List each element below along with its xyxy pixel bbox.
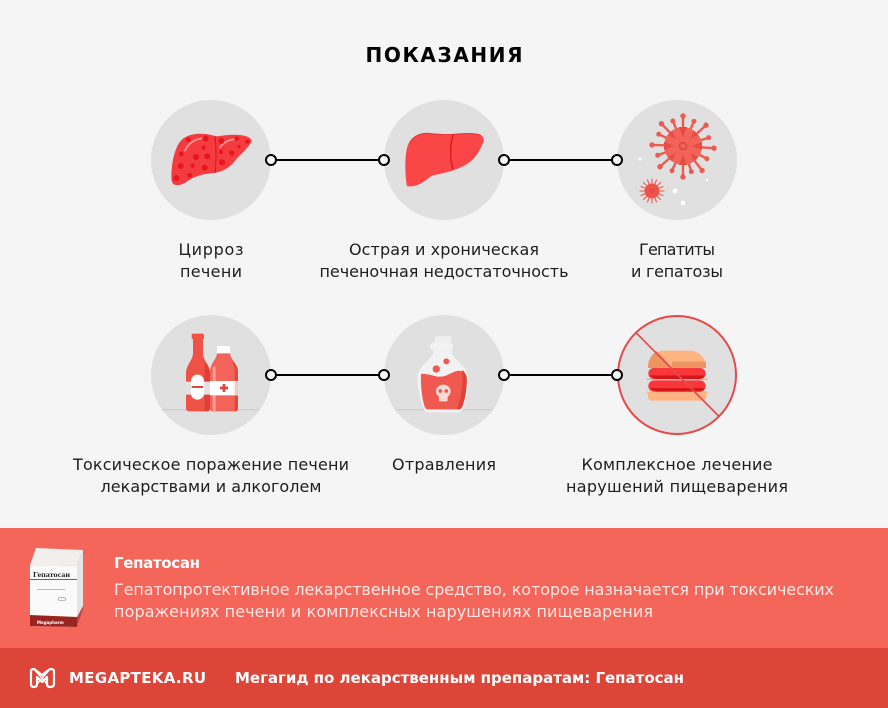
item: digestive disorders: [566, 316, 788, 496]
connector: row 1 left: [271, 159, 384, 161]
label: Гепатиты: [639, 240, 715, 259]
label: Отравления: [392, 455, 496, 474]
drug name: Гепатосан: [114, 554, 200, 572]
icon: burger: [636, 333, 719, 416]
item: cirrhosis: [151, 100, 271, 281]
item: toxic liver damage: [72, 315, 349, 496]
item: cirrhosis: печени: [180, 262, 242, 281]
icon: bottles: [186, 334, 238, 411]
icon: drug box: [30, 548, 83, 627]
connector: row 2 left: [271, 374, 384, 376]
connector: row 2 right: [504, 374, 617, 376]
icon: drug box: Megapharm: [37, 620, 64, 625]
icon: liver: [405, 133, 484, 186]
shelf: [395, 409, 493, 410]
item: digestive disorders: нарушений пищеварения: [566, 477, 788, 496]
drug description text: [114, 580, 834, 621]
label: Цирроз: [178, 240, 244, 259]
item: hepatitis: [617, 100, 737, 281]
icon: logo: [31, 669, 54, 687]
icon: poison flask: [417, 336, 468, 412]
item: toxic liver damage: лекарствами и алкоголем: [100, 477, 322, 496]
drug description text: Гепатопротективное лекарственное средство, которое назначается при токсических: [114, 580, 834, 599]
item: hepatitis: и гепатозы: [631, 262, 723, 281]
icon: viruses: [638, 114, 716, 205]
label: Острая и хроническая: [349, 240, 539, 259]
panel: drug description: [0, 528, 888, 648]
icon: cirrhotic liver: [171, 134, 252, 185]
item: liver failure: печеночная недостаточность: [320, 262, 568, 281]
footer band: [0, 648, 888, 708]
label: Токсическое поражение печени: [72, 455, 349, 474]
icon: drug box: Гепатосан: [33, 570, 71, 579]
drug description text: поражениях печени и комплексных нарушениях пищеварения: [114, 602, 653, 621]
label: Комплексное лечение: [582, 455, 772, 474]
shelf: [162, 409, 260, 410]
item: poisoning: [384, 315, 504, 474]
item: liver failure: [320, 100, 568, 281]
footer text: Мегагид по лекарственным препаратам: Гепатосан: [235, 669, 684, 687]
logo text: MEGAPTEKA.RU: [69, 669, 206, 687]
connector: row 1 right: [504, 159, 617, 161]
title: ПОКАЗАНИЯ: [366, 43, 522, 67]
connector nodes: [266, 155, 622, 380]
prohibition stroke: [636, 333, 719, 416]
